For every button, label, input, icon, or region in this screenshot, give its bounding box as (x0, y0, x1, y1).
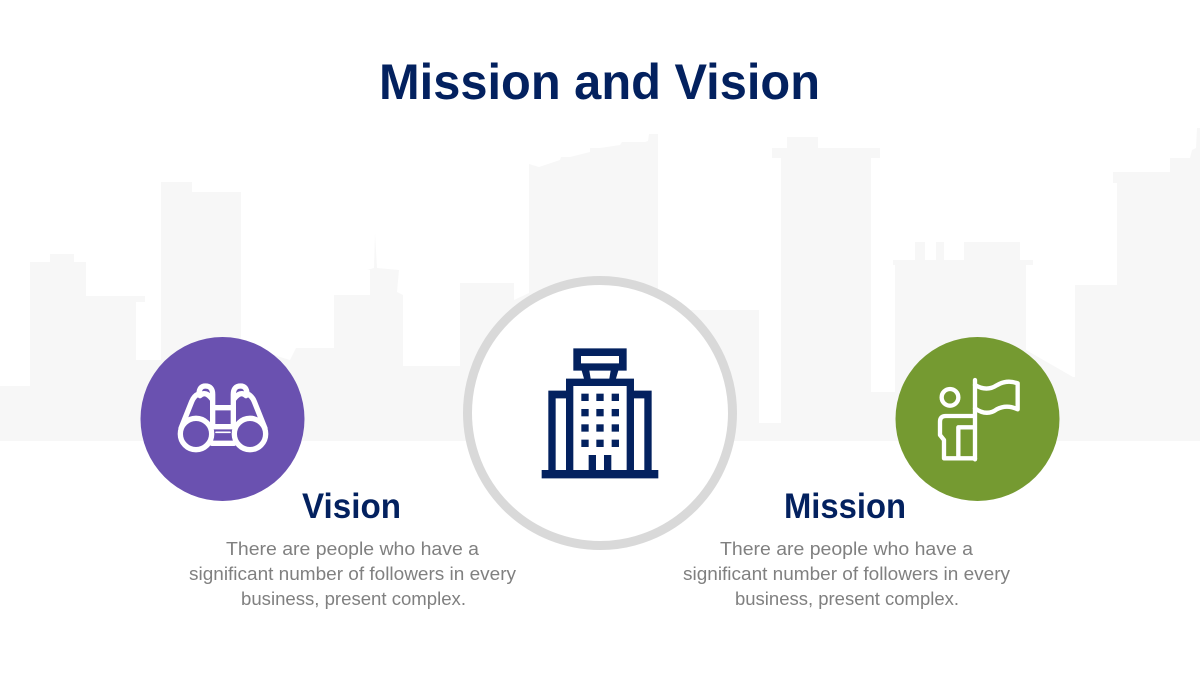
vision description (189, 539, 516, 609)
icon: person with flag (940, 380, 1018, 459)
background: city skyline silhouette (0, 128, 1200, 441)
vision circle with binoculars icon (140, 337, 304, 501)
center circle with building icon (468, 280, 732, 546)
mission text block (683, 487, 1010, 609)
icon: office building (542, 348, 658, 478)
icon: binoculars (180, 386, 266, 450)
mission heading: Mission (784, 487, 906, 526)
mission description: There are people who have a (720, 539, 974, 559)
vision description: significant number of followers in every (189, 564, 516, 584)
mission description (683, 539, 1010, 609)
mission description: business, present complex. (735, 589, 959, 609)
title: Mission and Vision (379, 54, 820, 110)
vision description: There are people who have a (226, 539, 480, 559)
mission description: significant number of followers in every (683, 564, 1010, 584)
vision text block (189, 487, 516, 609)
vision description: business, present complex. (241, 589, 466, 609)
mission circle with flag icon (896, 337, 1060, 501)
vision heading: Vision (302, 487, 401, 526)
